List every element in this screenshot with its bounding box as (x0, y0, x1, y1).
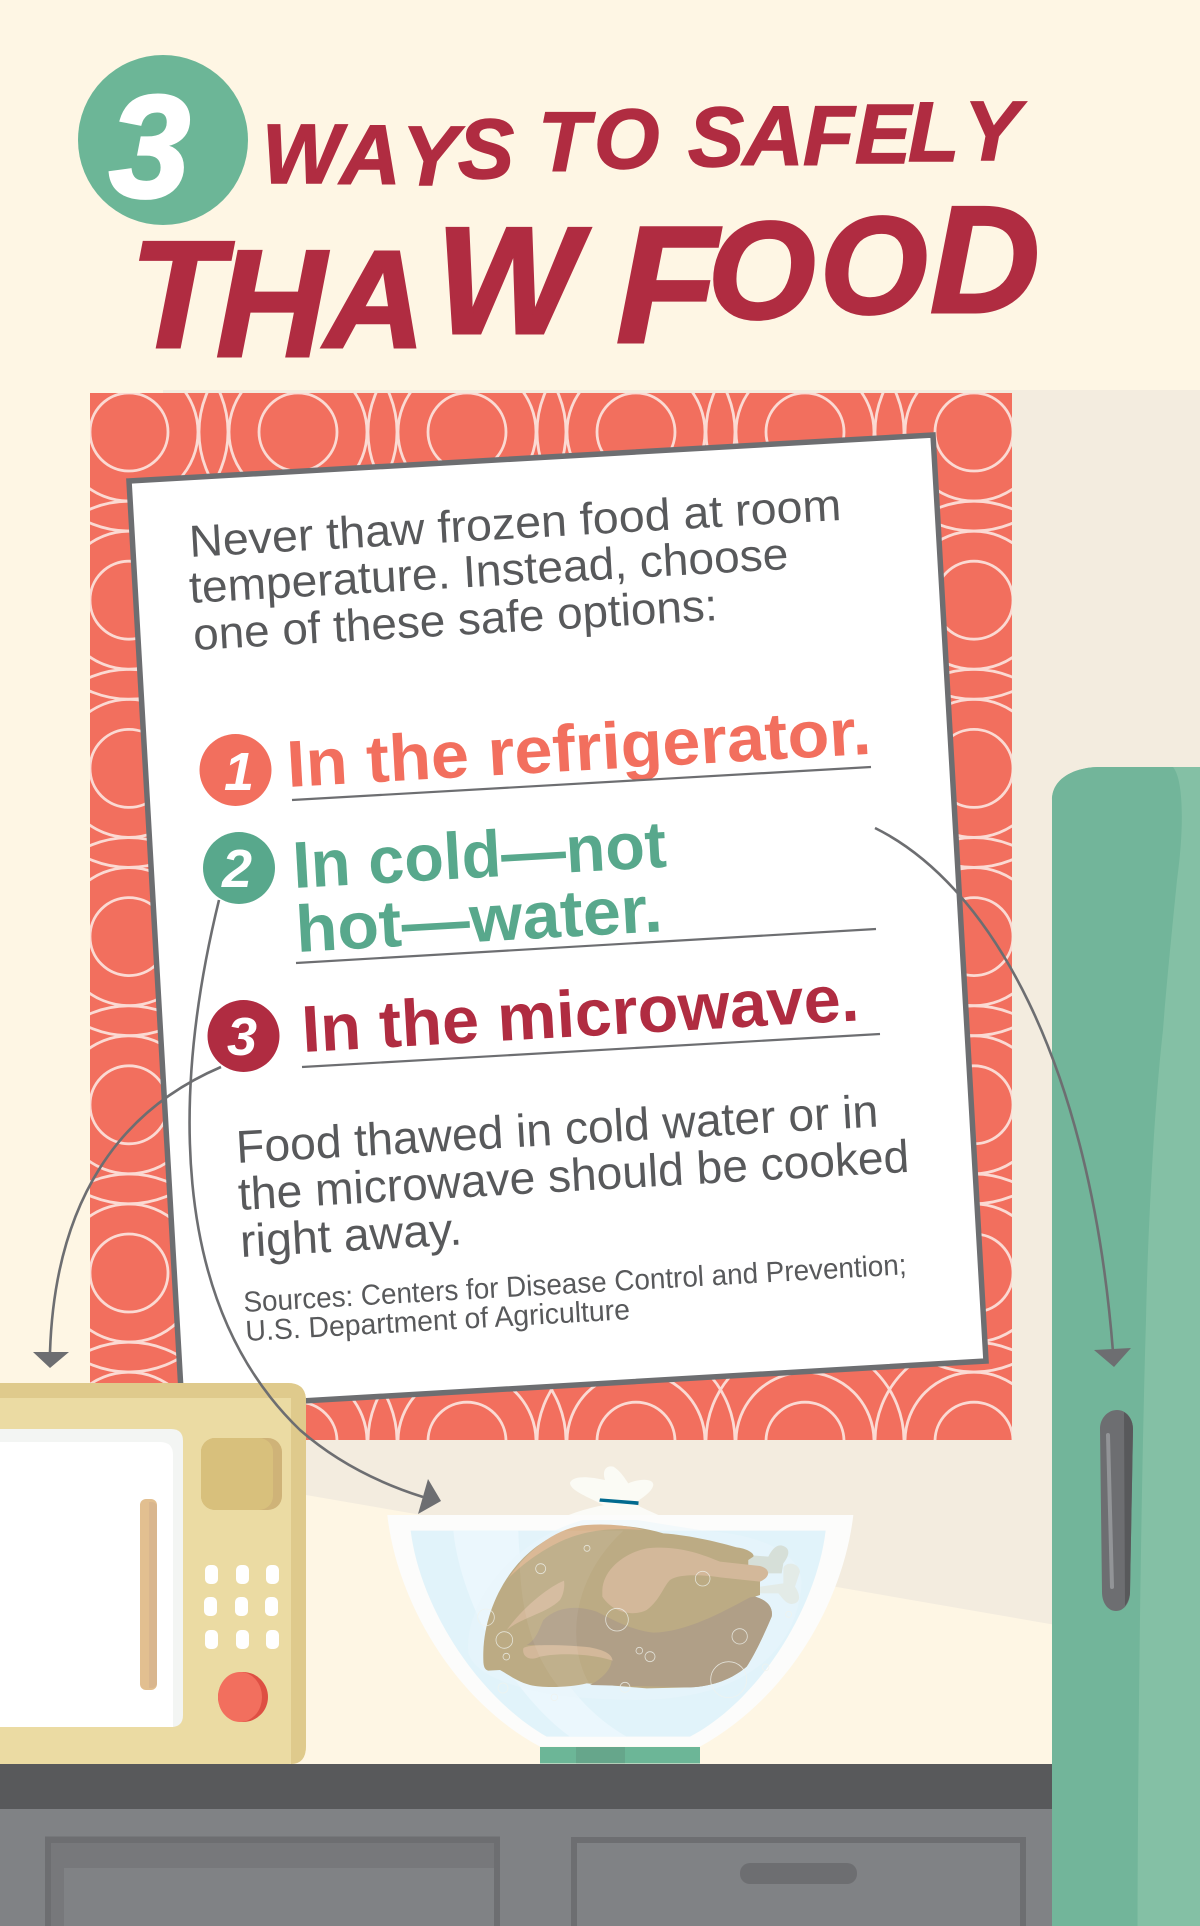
turkey top highlight (508, 1524, 643, 1578)
patterned coral panel (90, 393, 1012, 1440)
turkey body (483, 1525, 772, 1688)
intro text: temperature. Instead, choose (188, 528, 790, 613)
paper card (129, 435, 986, 1408)
turkey wing (602, 1548, 768, 1613)
microwave display (201, 1438, 282, 1510)
note text (235, 1085, 910, 1267)
title line: thaw food: H (216, 219, 329, 389)
microwave knob (218, 1672, 268, 1722)
wall shadow (163, 390, 1200, 1650)
title line: 3 ways to safely: WAYS TO SAFELY (262, 84, 1027, 203)
bag sheen (519, 1531, 623, 1688)
bag tie (599, 1498, 639, 1505)
title number badge (78, 55, 248, 228)
option 2: hot—water. (294, 871, 664, 966)
intro text: one of these safe options: (192, 579, 719, 660)
title line: thaw food: O (820, 189, 927, 343)
title line: thaw food: A (322, 223, 425, 377)
option 3: 3 (227, 1007, 257, 1067)
microwave (0, 1383, 306, 1764)
note text: Food thawed in cold water or in (235, 1085, 880, 1173)
sources: U.S. Department of Agriculture (245, 1294, 631, 1348)
intro text (188, 479, 843, 660)
option 1: 1 (224, 742, 254, 802)
note text: right away. (239, 1202, 463, 1267)
turkey breast highlight (507, 1581, 564, 1630)
title line: thaw food: W (436, 196, 591, 366)
cabinets (0, 1809, 1052, 1926)
option 2: 2 (221, 839, 252, 899)
cabinet door right (571, 1837, 1026, 1926)
bowl base (540, 1747, 700, 1764)
option 2: In cold—not (291, 807, 668, 902)
sources: Sources: Centers for Disease Control and Prevention; (243, 1249, 907, 1319)
option 3: In the microwave. (300, 960, 861, 1066)
bag knot (570, 1466, 653, 1505)
sources (243, 1249, 907, 1348)
bone back (748, 1545, 788, 1573)
bone front (760, 1564, 800, 1604)
bag neck (537, 1505, 703, 1531)
title line: thaw food: F (616, 193, 721, 378)
fridge handle (1100, 1410, 1133, 1611)
water (411, 1531, 826, 1737)
bowl rim (387, 1515, 853, 1747)
option 1: In the refrigerator. (285, 694, 873, 801)
arrow: cold water (190, 900, 441, 1514)
intro text: Never thaw frozen food at room (188, 479, 843, 567)
fridge (1052, 767, 1200, 1926)
title number badge: 3 (109, 65, 190, 228)
note text: the microwave should be cooked (237, 1130, 910, 1220)
arrow: microwave (33, 1067, 221, 1368)
microwave keypad (204, 1565, 279, 1649)
bubbles (478, 1545, 792, 1701)
option 2 (203, 807, 876, 966)
water highlight (453, 1531, 627, 1737)
title line: thaw food: O (708, 194, 815, 348)
turkey drumstick (523, 1645, 613, 1661)
turkey underside (527, 1597, 772, 1687)
cabinet door left (45, 1836, 500, 1926)
counter top (0, 1764, 1052, 1809)
bowl with thawing turkey (387, 1466, 853, 1747)
arrow: refrigerator (875, 828, 1131, 1367)
microwave door (0, 1429, 183, 1727)
title line: thaw food: T (130, 210, 234, 380)
title (130, 84, 1040, 389)
title line: thaw food: D (930, 175, 1040, 345)
bag outline (468, 1520, 802, 1700)
turkey (483, 1524, 800, 1688)
